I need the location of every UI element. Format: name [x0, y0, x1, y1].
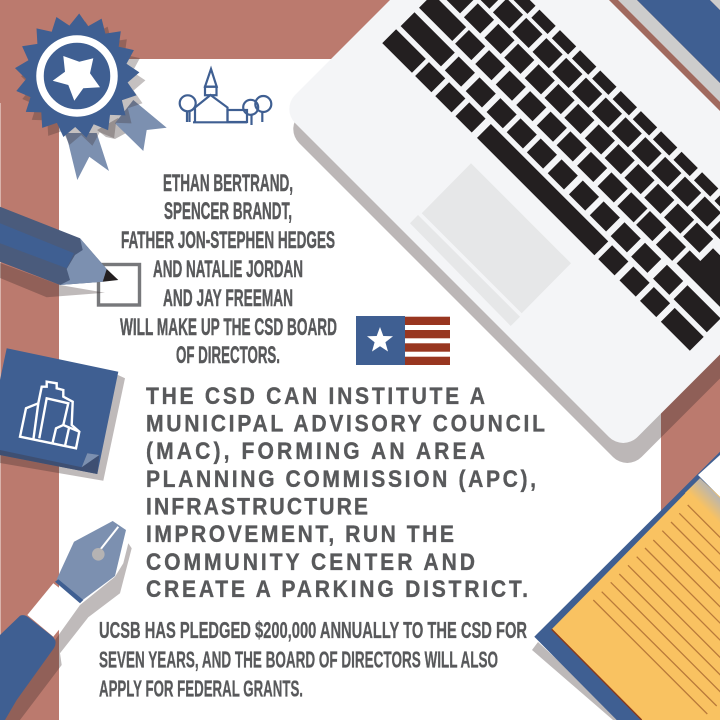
main CSD powers text block: IMPROVEMENT, RUN THE [146, 521, 454, 547]
pen nib [57, 521, 126, 600]
names text block: AND JAY FREEMAN [163, 285, 293, 312]
icon: fountain pen [0, 521, 132, 720]
funding text block: APPLY FOR FEDERAL GRANTS. [99, 676, 303, 702]
names text block: WILL MAKE UP THE CSD BOARD [120, 314, 337, 341]
page lines [593, 505, 720, 714]
pen barrel [0, 615, 56, 720]
names text block: OF DIRECTORS. [176, 342, 280, 369]
main CSD powers text block: COMMUNITY CENTER AND [146, 549, 475, 575]
icon: church and trees [180, 69, 271, 125]
badge star [53, 56, 100, 101]
pen collar [27, 583, 80, 637]
main CSD powers text block: PLANNING COMMISSION (APC), [146, 466, 536, 492]
ribbon badge [15, 14, 167, 180]
nib band [55, 579, 83, 603]
note body [0, 348, 118, 474]
icon: pencil [0, 207, 118, 297]
badge shadow [21, 22, 145, 146]
names text block: ETHAN BERTRAND, [163, 170, 293, 197]
names text block: SPENCER BRANDT, [164, 198, 292, 225]
nib slit and hole [92, 527, 118, 561]
names text block: AND NATALIE JORDAN [153, 256, 303, 283]
main CSD powers text block: MUNICIPAL ADVISORY COUNCIL [146, 410, 545, 437]
blue notebook behind laptop [607, 0, 720, 113]
white paper sheet [59, 59, 661, 720]
badge burst [15, 14, 139, 138]
book with yellow lined page [532, 452, 720, 720]
pen shadow [2, 543, 132, 720]
note shadow [0, 375, 125, 481]
badge ring [40, 39, 114, 113]
names text block [120, 170, 337, 369]
main CSD powers text block [146, 383, 545, 602]
main CSD powers text block: CREATE A PARKING DISTRICT. [146, 576, 528, 602]
main CSD powers text block: (MAC), FORMING AN AREA [146, 438, 485, 464]
keyboard [382, 0, 720, 357]
main CSD powers text block: INFRASTRUCTURE [146, 493, 368, 520]
names text block: FATHER JON-STEPHEN HEDGES [121, 227, 335, 254]
badge ribbons [65, 100, 167, 180]
laptop body [281, 0, 720, 451]
blue sticky note with building icon [0, 348, 125, 481]
main CSD powers text block: THE CSD CAN INSTITUTE A [146, 383, 485, 409]
laptop [281, 0, 720, 471]
note fold [0, 372, 118, 474]
funding text block [99, 617, 527, 702]
checkbox [98, 264, 140, 305]
trackpad [410, 163, 571, 326]
laptop shadow [285, 0, 720, 471]
icon: american flag [356, 316, 450, 365]
icon: buildings [20, 382, 79, 448]
